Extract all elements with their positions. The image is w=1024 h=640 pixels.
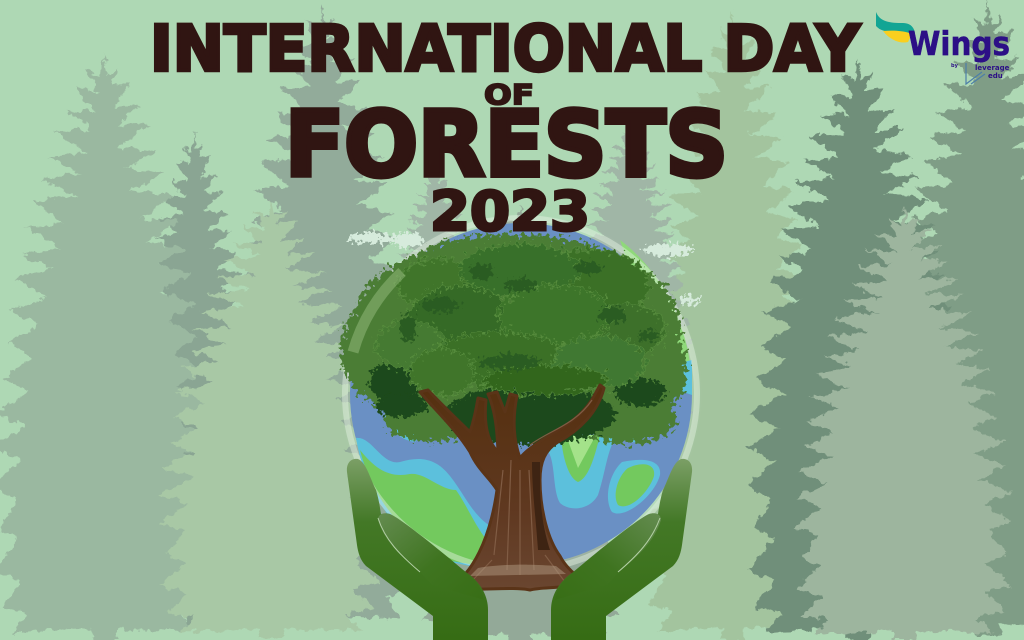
- tree: second left: [124, 132, 263, 624]
- globe: right island land: [616, 464, 654, 506]
- title line: international day: INTERNATIONAL DAY: [150, 12, 861, 86]
- tree: centre back: [224, 5, 418, 629]
- logo: wings by leverage edu: [876, 12, 1010, 84]
- tree: behind globe: [414, 205, 624, 640]
- title line: of: OF: [484, 78, 534, 111]
- right finger crease: [618, 518, 660, 572]
- left finger crease: [378, 518, 420, 572]
- logo: leverage edu mark: [966, 63, 985, 84]
- globe: top right land: [620, 240, 690, 365]
- globe: halo ring: [345, 218, 697, 570]
- trunk: ground band: [470, 565, 566, 576]
- hands: [347, 459, 692, 640]
- canopy: outer layer: [340, 234, 687, 444]
- tree: light front left: [159, 200, 381, 638]
- tree: right back: [643, 10, 821, 640]
- globe: left upper water: [385, 415, 425, 442]
- tree: large left: [0, 53, 214, 640]
- tree: far right: [884, 0, 1024, 636]
- canopy: glass highlight arc: [353, 272, 402, 352]
- trunk: [420, 385, 604, 590]
- globe: left continent water: [356, 438, 498, 570]
- canopy: dark undergrowth: [369, 362, 666, 445]
- logo: teal swoosh: [876, 12, 915, 35]
- trunk and branches: [420, 385, 604, 590]
- tree: light right: [794, 208, 1012, 640]
- globe: right island water: [608, 460, 660, 514]
- globe: central highlight: [566, 435, 596, 468]
- globe: central land: [561, 435, 600, 482]
- pale feathered foliage near globe: [348, 233, 700, 304]
- globe: top left water: [430, 250, 448, 275]
- globe: right edge water: [672, 360, 692, 395]
- trunk: dark side: [532, 462, 550, 550]
- logo: edu: edu: [988, 72, 1003, 80]
- logo: yellow swoosh: [883, 31, 912, 43]
- right thumb: [555, 513, 661, 600]
- title line: 2023: 2023: [430, 180, 590, 243]
- globe glow: [339, 212, 703, 576]
- trunk: bark lines: [470, 400, 592, 583]
- canopy: layered foliage lobes: [376, 244, 665, 396]
- logo: wings wordmark: Wings: [908, 24, 1010, 63]
- logo: leverage: leverage: [975, 64, 1010, 72]
- tree: [340, 234, 687, 590]
- globe: upper water: [629, 400, 660, 442]
- globe ocean: [350, 223, 692, 565]
- globe: [345, 218, 697, 570]
- tree: dark right: [746, 58, 968, 640]
- canopy: dark patches: [400, 262, 658, 369]
- logo: by: by: [951, 63, 959, 69]
- title: [150, 12, 861, 243]
- globe: central water: [547, 435, 617, 508]
- tree: small centre left: [382, 165, 487, 465]
- tree: small centre right: [566, 125, 692, 455]
- left hand: [347, 459, 488, 640]
- left thumb: [378, 513, 484, 600]
- canopy: [340, 234, 687, 445]
- right hand: [551, 459, 692, 640]
- title line: forests: FORESTS: [285, 92, 728, 198]
- globe: top left land: [400, 256, 420, 272]
- globe: left continent land: [360, 450, 494, 566]
